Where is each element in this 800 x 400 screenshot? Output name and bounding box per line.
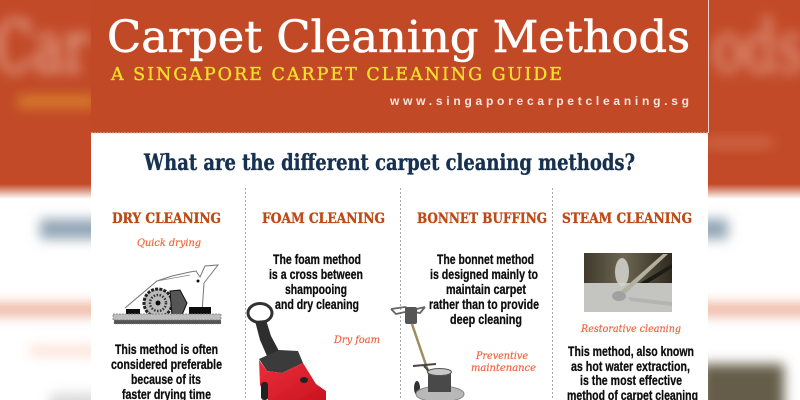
panel: dry cleaning bbox=[111, 211, 222, 400]
foam cleaning heading: FOAM CLEANING bbox=[262, 211, 385, 227]
bonnet buffing tag bbox=[471, 350, 536, 374]
bonnet buffing description: rather than to provide bbox=[429, 296, 539, 312]
panel: bonnet buffing bbox=[391, 211, 547, 400]
bonnet buffing description: deep cleaning bbox=[450, 311, 522, 327]
subtitle: A SINGAPORE CARPET CLEANING GUIDE bbox=[110, 65, 562, 85]
photo: steam cleaning wand on carpet bbox=[584, 253, 672, 312]
panel: foam cleaning bbox=[248, 211, 385, 400]
steam cleaning description: This method, also known bbox=[568, 343, 694, 359]
dry cleaning tag: Quick drying bbox=[137, 237, 201, 249]
dry cleaning description: considered preferable bbox=[111, 356, 222, 372]
section heading: What are the different carpet cleaning methods? bbox=[143, 150, 635, 176]
title: Carpet Cleaning Methods bbox=[107, 12, 690, 63]
foam cleaning description: The foam method bbox=[273, 251, 361, 267]
bonnet buffing heading: BONNET BUFFING bbox=[417, 211, 547, 227]
foam cleaning description: shampooing bbox=[285, 281, 347, 297]
foam cleaning tag: Dry foam bbox=[333, 334, 380, 346]
bonnet buffing description bbox=[429, 251, 539, 327]
foam cleaning description: is a cross between bbox=[269, 266, 363, 282]
steam cleaning tag: Restorative cleaning bbox=[580, 323, 681, 335]
dry cleaning description bbox=[111, 341, 222, 400]
foam cleaning description bbox=[269, 251, 363, 312]
main infographic panel bbox=[91, 0, 709, 400]
bonnet buffing tag: Preventive bbox=[475, 350, 528, 362]
icon: red foam cleaning machine bbox=[248, 304, 326, 400]
bonnet buffing description: The bonnet method bbox=[437, 251, 534, 267]
steam cleaning description: is the most effective bbox=[580, 372, 682, 388]
steam cleaning description: as hot water extraction, bbox=[571, 358, 690, 374]
steam cleaning heading: STEAM CLEANING bbox=[562, 211, 692, 227]
bonnet buffing description: maintain carpet bbox=[446, 281, 526, 297]
panel: steam cleaning bbox=[562, 211, 698, 400]
foam cleaning description: and dry cleaning bbox=[275, 296, 359, 312]
website url: www.singaporecarpetcleaning.sg bbox=[389, 94, 689, 108]
dry cleaning description: This method is often bbox=[115, 341, 218, 357]
icon: dry cleaning machine diagram bbox=[113, 265, 221, 324]
bonnet buffing tag: maintenance bbox=[471, 362, 536, 374]
bonnet buffing description: is designed mainly to bbox=[430, 266, 538, 282]
steam cleaning description bbox=[567, 343, 698, 400]
dry cleaning description: because of its bbox=[131, 371, 201, 387]
dry cleaning heading: DRY CLEANING bbox=[112, 211, 221, 227]
icon: floor buffing machine bbox=[391, 307, 464, 400]
